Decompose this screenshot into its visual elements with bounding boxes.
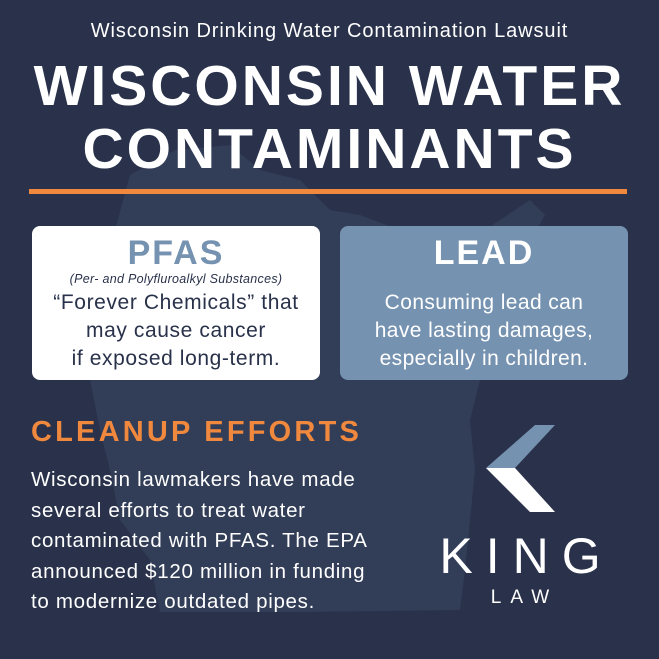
title: WISCONSIN WATER: [34, 54, 625, 118]
panel: LEAD: especially in children.: [380, 347, 588, 370]
panel: PFAS: [32, 226, 320, 380]
text: cleanup body: to modernize outdated pipes.: [31, 590, 315, 613]
panel: LEAD: Consuming lead can: [385, 291, 583, 314]
title: [34, 54, 625, 181]
panel: PFAS: may cause cancer: [86, 319, 266, 342]
icon: chevron: [486, 425, 555, 512]
text: cleanup body: contaminated with PFAS. The EPA: [31, 529, 368, 552]
logo: King Law: [439, 425, 614, 608]
text: cleanup body: announced $120 million in funding: [31, 560, 365, 582]
subtitle: Wisconsin Drinking Water Contamination Lawsuit: [91, 20, 568, 42]
orange divider: [29, 189, 627, 194]
text: cleanup body: several efforts to treat water: [31, 498, 306, 522]
panel: LEAD: have lasting damages,: [375, 319, 593, 342]
logo: King Law: LAW: [491, 587, 558, 608]
panel: PFAS: (Per- and Polyfluroalkyl Substances): [70, 272, 282, 286]
logo text: KING: [439, 528, 614, 584]
title: CONTAMINANTS: [82, 117, 577, 181]
text: cleanup body: [31, 468, 368, 613]
panel: PFAS: if exposed long-term.: [72, 347, 280, 370]
panel: PFAS: “Forever Chemicals” that: [53, 291, 299, 314]
panel: LEAD: [340, 226, 628, 380]
heading: cleanup efforts: CLEANUP EFFORTS: [31, 416, 362, 448]
panel: LEAD: LEAD: [434, 234, 534, 272]
text: cleanup body: Wisconsin lawmakers have made: [31, 468, 356, 491]
panel: PFAS: PFAS: [128, 234, 224, 272]
